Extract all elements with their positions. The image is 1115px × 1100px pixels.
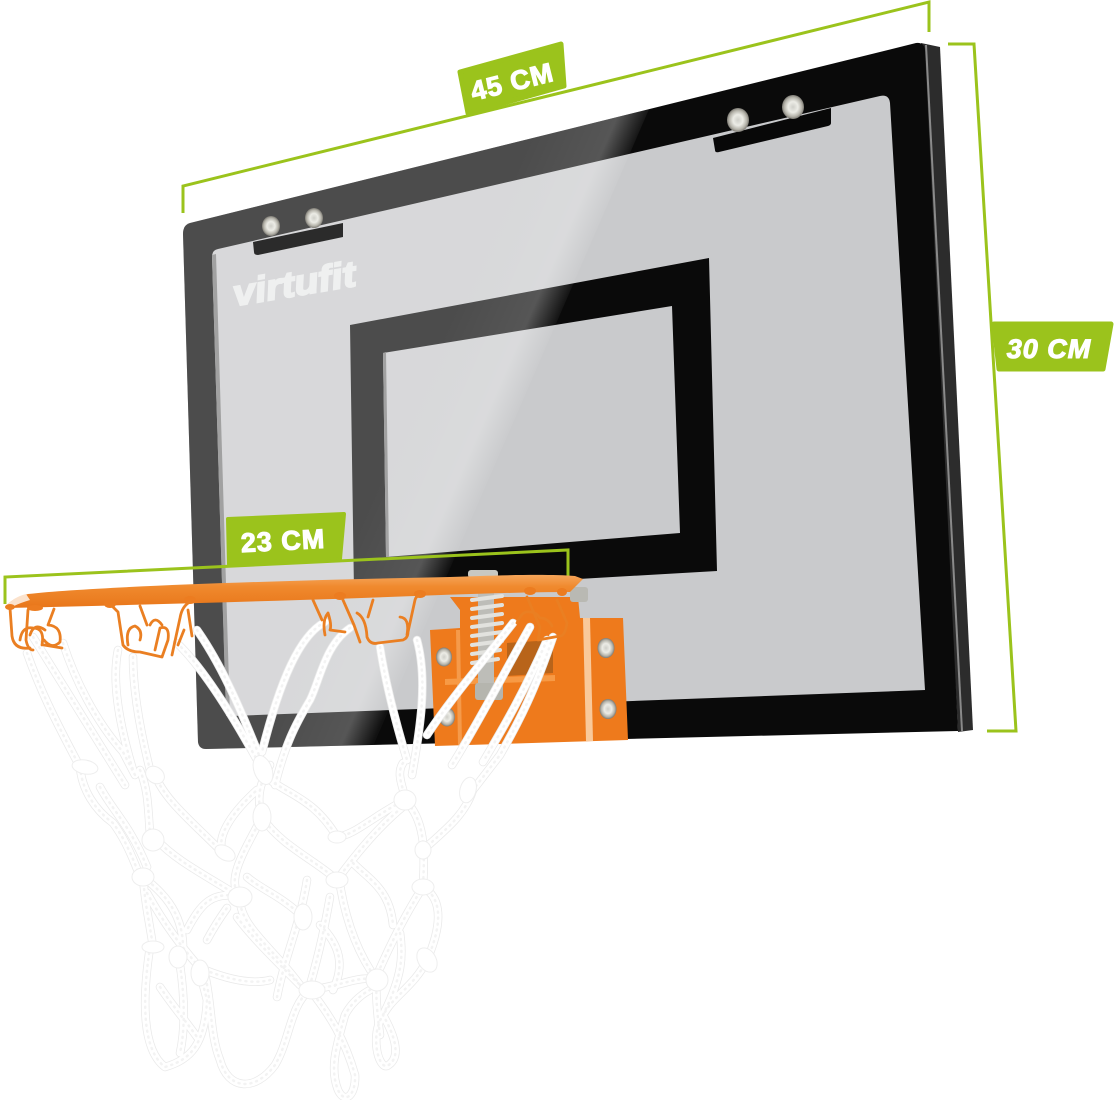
screws (262, 95, 804, 236)
mounting tab right (713, 108, 831, 152)
slot (507, 640, 553, 676)
board grey panel (212, 96, 925, 716)
label: 30 CM (994, 324, 1111, 369)
plate bolts (436, 638, 616, 726)
hoop bracket (430, 570, 628, 746)
board side edge (921, 43, 973, 732)
dimension line: rim diameter (5, 550, 568, 604)
panel bevel (212, 254, 230, 716)
mounting tab left (253, 223, 343, 255)
net cord core (27, 622, 553, 1097)
board black frame (183, 43, 958, 749)
glossy reflection (170, 100, 653, 760)
label: 30 CM: 30 CM (1007, 334, 1091, 364)
net braid texture (27, 622, 553, 1097)
net hooks (10, 595, 567, 657)
side nut (570, 587, 588, 602)
net cord shading (27, 622, 553, 1097)
label: 45 CM: 45 CM (468, 57, 557, 107)
net (27, 622, 553, 1097)
shooting square (350, 258, 717, 592)
backboard (170, 43, 973, 760)
hoop rim (5, 575, 583, 611)
dimension line: board width (183, 2, 929, 213)
dimension line: board height (948, 44, 1016, 731)
label: 45 CM (460, 44, 564, 113)
label: 23 CM (228, 514, 344, 564)
logo: virtufit (230, 253, 361, 314)
net knots (71, 753, 479, 999)
wall plate (430, 597, 628, 746)
square bevel (383, 352, 389, 557)
label: 23 CM: 23 CM (240, 524, 326, 558)
spring (468, 570, 503, 700)
